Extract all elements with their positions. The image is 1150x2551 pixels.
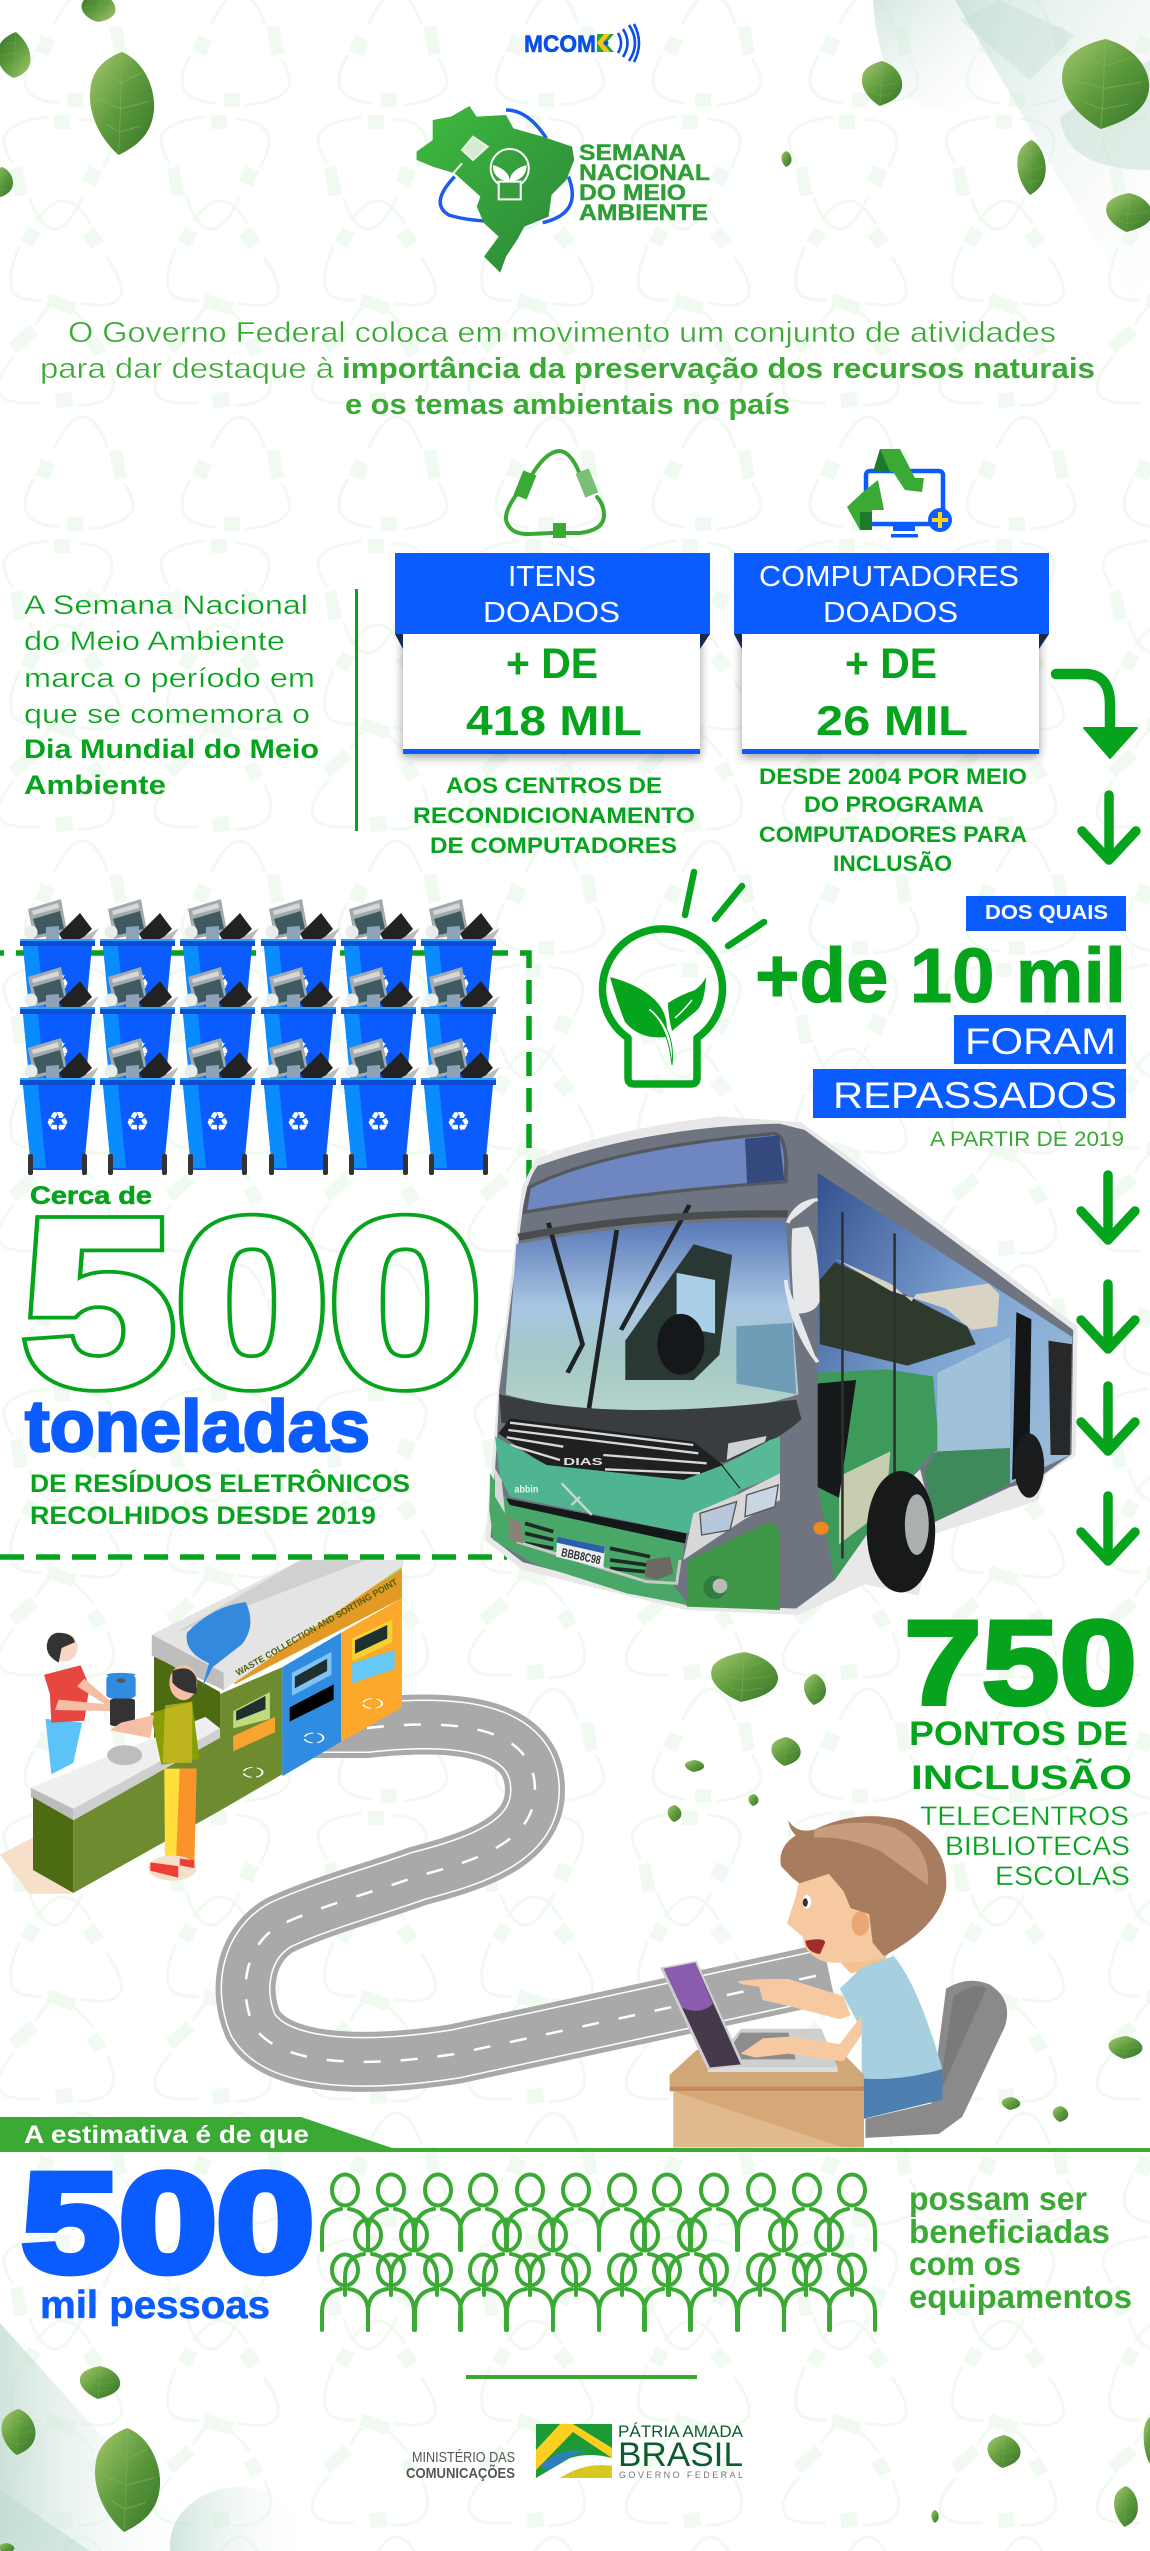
stat: 500 mil pessoas xyxy=(22,2144,314,2327)
footer: ministério das comunicações: COMUNICAÇÕES xyxy=(406,2464,515,2482)
panel: dos quais mais de 10 mil: FORAM xyxy=(965,1021,1116,1062)
panel: itens doados: 418 MIL xyxy=(466,697,642,744)
intro text: importância da preservação dos recursos naturais xyxy=(342,353,1095,385)
text block: Semana Nacional description: Ambiente xyxy=(24,770,166,800)
slots xyxy=(233,1692,270,1728)
stat: 500 mil pessoas: mil pessoas xyxy=(40,2284,270,2327)
text block: Semana Nacional description: Dia Mundial do Meio xyxy=(24,734,319,764)
sign text on booth: WASTE COLLECTION AND SORTING POINT xyxy=(234,1576,400,1678)
text block: possam ser beneficiadas: possam ser xyxy=(909,2180,1087,2217)
panel: computadores doados xyxy=(734,553,1049,754)
text block: Semana Nacional description: que se comemora o xyxy=(24,699,310,729)
panel: dos quais mais de 10 mil xyxy=(755,896,1126,1151)
falling leaves: top area xyxy=(0,0,1150,232)
footer: pátria amada brasil logo: BRASIL xyxy=(618,2436,743,2474)
roof xyxy=(152,1560,403,1690)
logo title text: SEMANA xyxy=(579,140,686,165)
upper frame xyxy=(518,1214,788,1237)
person in red xyxy=(45,1719,82,1774)
hood band xyxy=(499,1394,801,1463)
dashed frame: e-waste xyxy=(0,953,529,1557)
icon: blue recycling bins full of electronics xyxy=(20,899,500,1175)
panel: dos quais mais de 10 mil: +de 10 mil xyxy=(755,933,1126,1019)
text block: possam ser beneficiadas: equipamentos xyxy=(909,2278,1132,2315)
arrow: down xyxy=(1082,795,1136,860)
text block: possam ser beneficiadas: com os xyxy=(909,2245,1021,2282)
hair xyxy=(780,1816,946,1956)
card body xyxy=(742,634,1039,754)
stat: 750 pontos de inclusão: BIBLIOTECAS xyxy=(945,1831,1130,1861)
panel: dos quais mais de 10 mil: DOS QUAIS xyxy=(985,902,1108,924)
text: desde 2004: DESDE 2004 POR MEIO xyxy=(759,764,1027,789)
floor xyxy=(0,1837,73,1894)
bus front: grille, panels, bumper, lights: BBB8C98 xyxy=(560,1545,602,1567)
footer: ministério das comunicações xyxy=(406,2449,515,2482)
panel: computadores doados: DOADOS xyxy=(823,597,958,629)
falling leaves: footer area xyxy=(0,2366,1150,2551)
panel: dos quais mais de 10 mil: REPASSADOS xyxy=(833,1075,1117,1116)
sign xyxy=(231,1568,402,1684)
illustration: boy at laptop xyxy=(660,1816,1007,2147)
vertical divider xyxy=(355,589,358,831)
arrow: curved xyxy=(1056,674,1137,758)
panel: dos quais mais de 10 mil: A PARTIR DE 2019 xyxy=(930,1128,1124,1151)
halo xyxy=(485,1116,1078,1615)
text: desde 2004: INCLUSÃO xyxy=(833,851,952,876)
arrows: four down arrows xyxy=(1081,1175,1135,1561)
logo title text: NACIONAL xyxy=(579,160,710,185)
door lines xyxy=(842,1212,895,1559)
wheels xyxy=(867,1471,935,1592)
destination window xyxy=(525,1134,786,1212)
text: desde 2004: COMPUTADORES PARA xyxy=(759,822,1027,847)
neck xyxy=(829,1943,887,1973)
chair xyxy=(865,1981,1007,2138)
stat: 750 pontos de inclusão: 750 xyxy=(904,1596,1137,1730)
stat: 750 pontos de inclusão xyxy=(904,1596,1137,1891)
header xyxy=(395,553,710,634)
bus front: grille, panels, bumper, lights: abbin xyxy=(514,1485,538,1496)
icon: computer with recycling arrows xyxy=(847,449,952,538)
bus upper body, side and windshield xyxy=(485,1116,1078,1615)
stat: 500 toneladas: 500 xyxy=(22,1171,482,1435)
text block: possam ser beneficiadas xyxy=(909,2180,1132,2315)
intro text xyxy=(40,317,1095,421)
icon: crowd of people xyxy=(322,2174,875,2330)
shorts xyxy=(862,2069,942,2119)
header xyxy=(734,553,1049,634)
value: + DE xyxy=(845,640,937,688)
text: aos centros: DE COMPUTADORES xyxy=(430,833,677,858)
banner: a estimativa: A estimativa é de que xyxy=(24,2121,309,2149)
text block: Semana Nacional description: marca o período em xyxy=(24,663,315,693)
road xyxy=(246,1724,829,2062)
intro text: para dar destaque à xyxy=(40,353,334,385)
panel: itens doados: ITENS xyxy=(508,561,596,593)
intro text: e os temas ambientais no país xyxy=(345,389,790,421)
shirt xyxy=(840,1956,942,2079)
falling leaves: middle and lower area xyxy=(668,1652,1142,2122)
panel: itens doados: DOADOS xyxy=(483,597,620,629)
side windows xyxy=(818,1173,1072,1580)
corner decoration: bottom left shapes xyxy=(0,2323,310,2551)
stat: 500 toneladas: Cerca de xyxy=(30,1182,152,1210)
mirror xyxy=(786,1200,818,1362)
text: aos centros: AOS CENTROS DE xyxy=(446,773,662,798)
logo title text xyxy=(579,140,710,225)
MCOM logo xyxy=(524,24,639,62)
panel: computadores doados: 26 MIL xyxy=(816,697,968,744)
footer divider xyxy=(466,2375,697,2379)
bus front: grille, panels, bumper, lights: DIAS xyxy=(563,1457,603,1468)
text block: Semana Nacional description xyxy=(24,590,319,800)
booth sides xyxy=(154,1656,220,1811)
stat: 500 toneladas: 500 xyxy=(22,1171,482,1435)
MCOM logo: MCOM xyxy=(524,31,596,58)
text block: Semana Nacional description: A Semana Nacional xyxy=(24,590,308,620)
value: + DE xyxy=(506,640,598,688)
stat: 500 toneladas: DE RESÍDUOS ELETRÔNICOS xyxy=(30,1468,410,1498)
card body xyxy=(403,634,700,754)
bus illustration xyxy=(485,1116,1078,1615)
intro text: O Governo Federal coloca em movimento um conjunto de atividades xyxy=(68,317,1056,349)
speech bubble xyxy=(187,1602,250,1688)
corner decoration: top right shapes xyxy=(873,0,1150,333)
stat: 750 pontos de inclusão: PONTOS DE xyxy=(909,1715,1128,1753)
Semana Nacional do Meio Ambiente logo xyxy=(417,106,710,273)
stat: 500 mil pessoas: 500 xyxy=(22,2144,314,2301)
icon: Brazil map with plug and bulb xyxy=(417,106,574,273)
stat: 500 toneladas: toneladas xyxy=(25,1387,370,1467)
banner: a estimativa xyxy=(0,2117,1150,2152)
desk xyxy=(670,2050,864,2086)
footer: pátria amada brasil logo: GOVERNO FEDERAL xyxy=(619,2470,743,2480)
text: aos centros: RECONDICIONAMENTO xyxy=(413,803,695,828)
panel: itens doados xyxy=(395,553,710,754)
text: desde 2004 xyxy=(759,764,1027,876)
logo title text: DO MEIO xyxy=(579,180,686,205)
face xyxy=(787,1860,887,1963)
footer: pátria amada brasil logo: PÁTRIA AMADA xyxy=(618,2422,744,2441)
arms xyxy=(737,1979,851,2019)
icon: plug recycling loop xyxy=(506,451,604,538)
stat: 750 pontos de inclusão: TELECENTROS xyxy=(920,1801,1129,1831)
counter xyxy=(31,1717,220,1820)
illustration: collection booth and people xyxy=(0,1560,403,1894)
text: aos centros xyxy=(413,773,695,858)
windshield xyxy=(506,1221,798,1413)
bus front: grille, panels, bumper, lights xyxy=(489,1418,780,1610)
bottle xyxy=(106,1673,136,1677)
icon: flag mark xyxy=(536,2424,612,2478)
panel: computadores doados: COMPUTADORES xyxy=(759,561,1019,593)
logo title text: AMBIENTE xyxy=(579,200,708,225)
person in yellow xyxy=(164,1769,197,1866)
footer: ministério das comunicações: MINISTÉRIO DAS xyxy=(412,2449,515,2466)
text: desde 2004: DO PROGRAMA xyxy=(804,792,984,817)
text block: possam ser beneficiadas: beneficiadas xyxy=(909,2213,1110,2250)
laptop xyxy=(708,2029,838,2069)
stat: 750 pontos de inclusão: INCLUSÃO xyxy=(911,1759,1132,1797)
stat: 500 toneladas: RECOLHIDOS DESDE 2019 xyxy=(30,1502,376,1530)
orange side marker xyxy=(813,1522,829,1535)
text block: Semana Nacional description: do Meio Ambiente xyxy=(24,626,285,656)
body base xyxy=(491,1124,1073,1609)
icon: light bulb with leaves xyxy=(603,872,764,1084)
footer: pátria amada brasil logo xyxy=(536,2422,744,2480)
stat: 750 pontos de inclusão: ESCOLAS xyxy=(995,1861,1130,1891)
stat: 500 toneladas xyxy=(22,1171,482,1530)
